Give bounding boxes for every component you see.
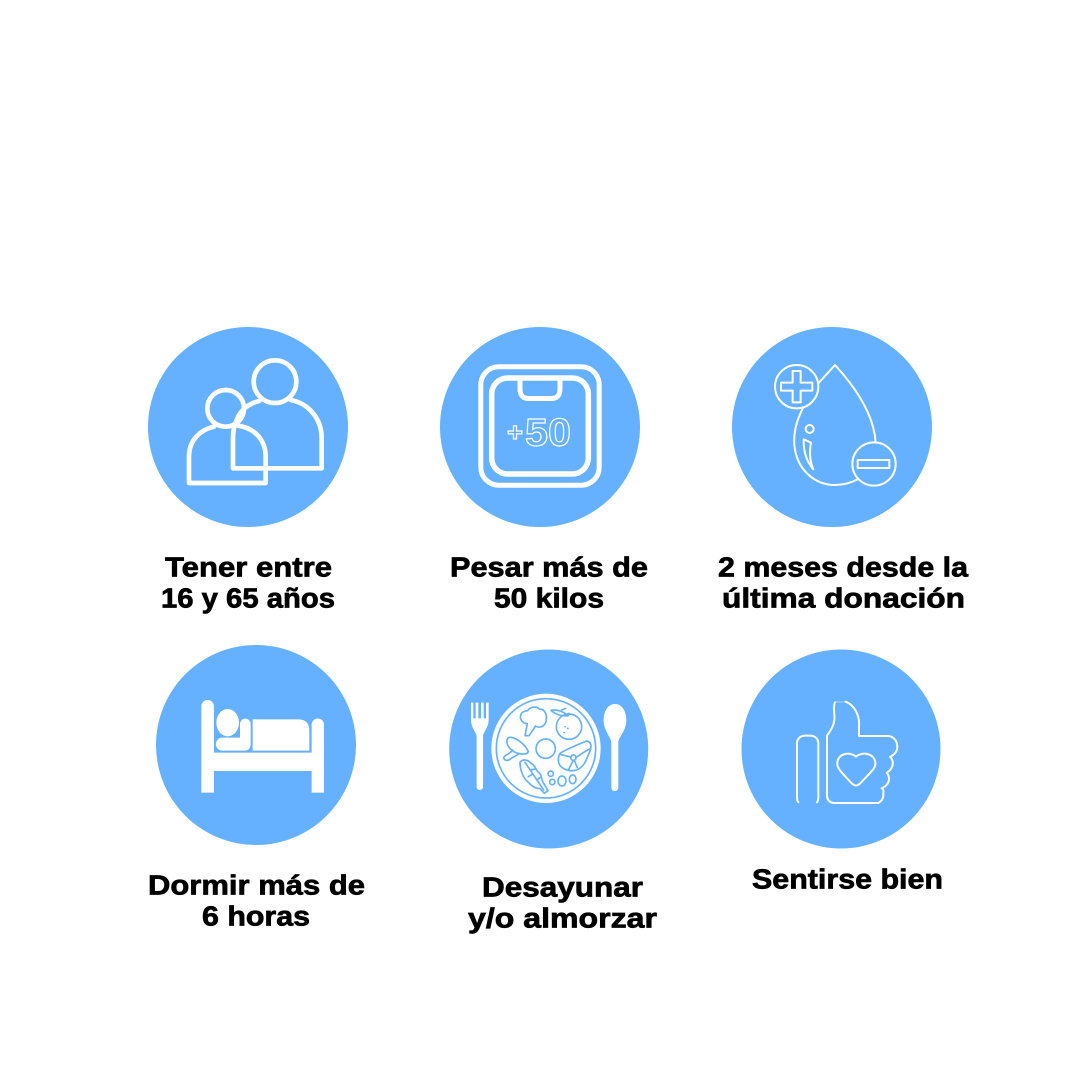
label: sleep: Dormir más de (148, 870, 365, 901)
label: feeling well: Sentirse bien (752, 864, 943, 895)
icon: leaf (520, 760, 548, 793)
label: sleep: 6 horas (202, 901, 310, 932)
icon: mushroom (507, 737, 528, 754)
panel: age requirement (148, 327, 348, 614)
label: weight: Pesar más de (450, 552, 648, 583)
label: age (161, 552, 335, 614)
icon: seeds (548, 771, 553, 776)
icon: scale: + (507, 417, 523, 447)
icon: salmon (558, 741, 591, 771)
label: last donation: última donación (722, 583, 965, 614)
panel: sleep requirement (148, 645, 365, 932)
icon: scale (440, 327, 640, 527)
icon: fork (471, 703, 489, 790)
icon: plate (491, 694, 601, 803)
panel: weight requirement (440, 327, 648, 614)
icon: orange (556, 714, 582, 739)
label: age: 16 y 65 años (161, 583, 335, 614)
icon: plate with fork and spoon (449, 650, 648, 848)
label: meals (468, 872, 657, 934)
icon: egg (536, 739, 555, 758)
label: weight (450, 552, 648, 614)
icon: two people (148, 327, 348, 527)
label: last donation: 2 meses desde la (718, 552, 968, 583)
label: sleep (148, 870, 365, 932)
icon: blood drop with plus and minus (732, 327, 932, 527)
icon: scale: 50 (525, 412, 571, 454)
icon: broccoli (520, 707, 546, 736)
label: meals: y/o almorzar (468, 903, 657, 934)
label: last donation (718, 552, 968, 614)
panel: time since last donation (718, 327, 968, 614)
icon: spoon (604, 704, 626, 791)
icon: thumbs up with heart (742, 650, 940, 848)
label: age: Tener entre (165, 552, 332, 583)
icon: person in bed (156, 645, 356, 845)
label: meals: Desayunar (482, 872, 643, 903)
panel: feeling well (742, 650, 943, 895)
panel: meal requirement (449, 650, 657, 934)
label: weight: 50 kilos (494, 583, 604, 614)
